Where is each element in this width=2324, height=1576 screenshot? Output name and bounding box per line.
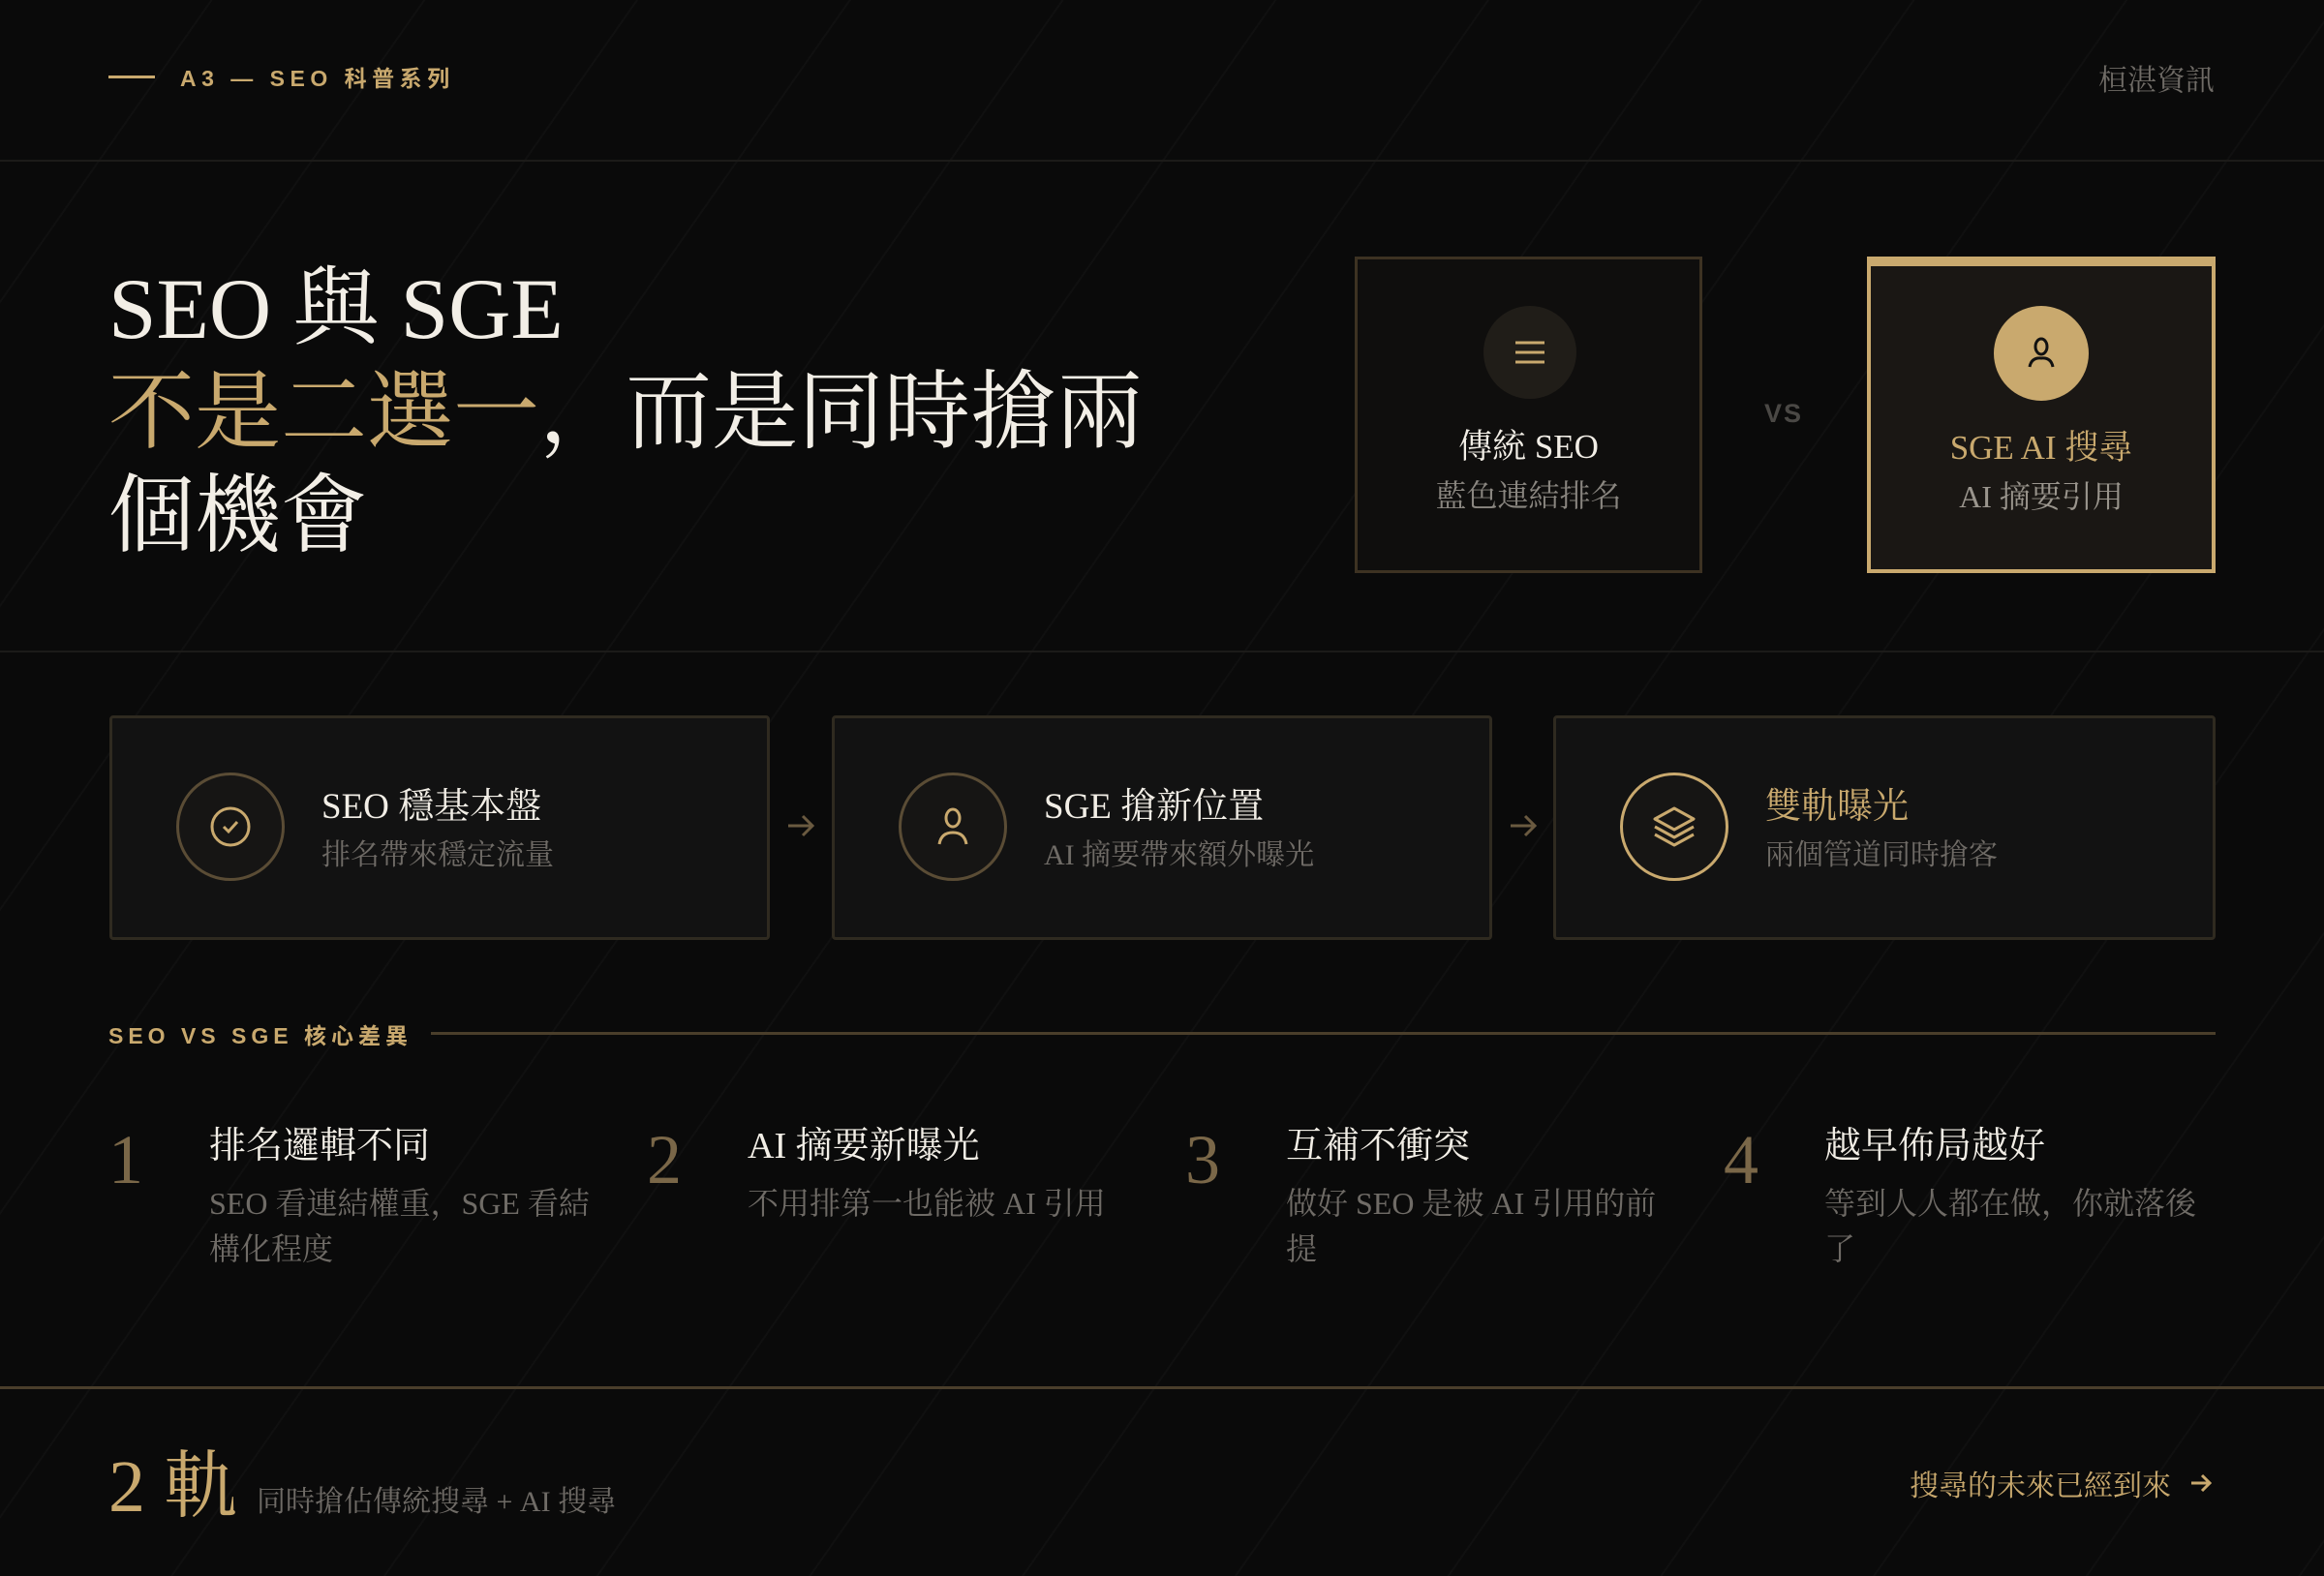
flow card 2: SGE 搶新位置 [1044,787,1264,827]
header label: A3 — SEO 科普系列 [180,66,455,91]
text: 互補不衝突 [1286,1126,1470,1167]
section heading: SEO VS SGE 核心差異 [108,1023,413,1048]
flow card 1: SEO 穩基本盤 [321,787,541,827]
text: 4 [1724,1121,1758,1198]
title: 不是二選一，而是同時搶兩 [108,366,1143,461]
card: SGE AI: SGE AI 搜尋 [1950,429,2132,467]
text: 2 [647,1121,682,1198]
icon: check [176,773,285,881]
brand name: 桓湛資訊 [2098,65,2215,97]
flow card 3: 兩個管道同時搶客 [1765,839,1998,871]
card: SGE AI: AI 摘要引用 [1959,479,2124,514]
icon: menu [1483,306,1576,399]
text: SEO 看連結權重，SGE 看結構化程度 [209,1186,590,1266]
text: 不用排第一也能被 AI 引用 [748,1186,1106,1221]
item 4 [1724,1121,2196,1266]
flow card 2: AI 摘要帶來額外曝光 [1044,839,1314,871]
flow card 1 [109,715,770,940]
title: 個機會 [108,470,367,564]
text: 1 [108,1121,143,1198]
arrow 1 [788,815,814,836]
icon: user gold [1994,306,2089,401]
footer stat: 同時搶佔傳統搜尋 + AI 搜尋 [257,1486,616,1518]
item 2 [647,1121,1106,1221]
flow card 2 [832,715,1492,940]
text: 3 [1185,1121,1220,1198]
footer stat [108,1446,616,1528]
card: traditional SEO: 藍色連結排名 [1435,478,1621,513]
title: SEO 與 SGE [108,262,564,357]
text: 排名邏輯不同 [209,1126,430,1167]
flow card 3: 雙軌曝光 [1765,787,1909,827]
footer stat: 2 軌 [108,1446,237,1528]
arrow 2 [1511,815,1537,836]
card: traditional SEO [1355,257,1702,573]
vs label: VS [1764,399,1803,428]
flow card 1: 排名帶來穩定流量 [321,839,554,871]
footer cta: 搜尋的未來已經到來 [1910,1470,2171,1502]
text: 越早佈局越好 [1824,1126,2045,1167]
icon: user [899,773,1007,881]
text: AI 摘要新曝光 [748,1126,980,1167]
text: 等到人人都在做，你就落後了 [1824,1186,2196,1266]
title [108,262,1143,564]
icon: layers [1620,773,1728,881]
flow card 3 [1553,715,2216,940]
item 1 [108,1121,590,1266]
item 3 [1185,1121,1656,1266]
text: 做好 SEO 是被 AI 引用的前提 [1286,1186,1656,1266]
card: SGE AI [1867,257,2216,573]
card: traditional SEO: 傳統 SEO [1458,428,1599,466]
